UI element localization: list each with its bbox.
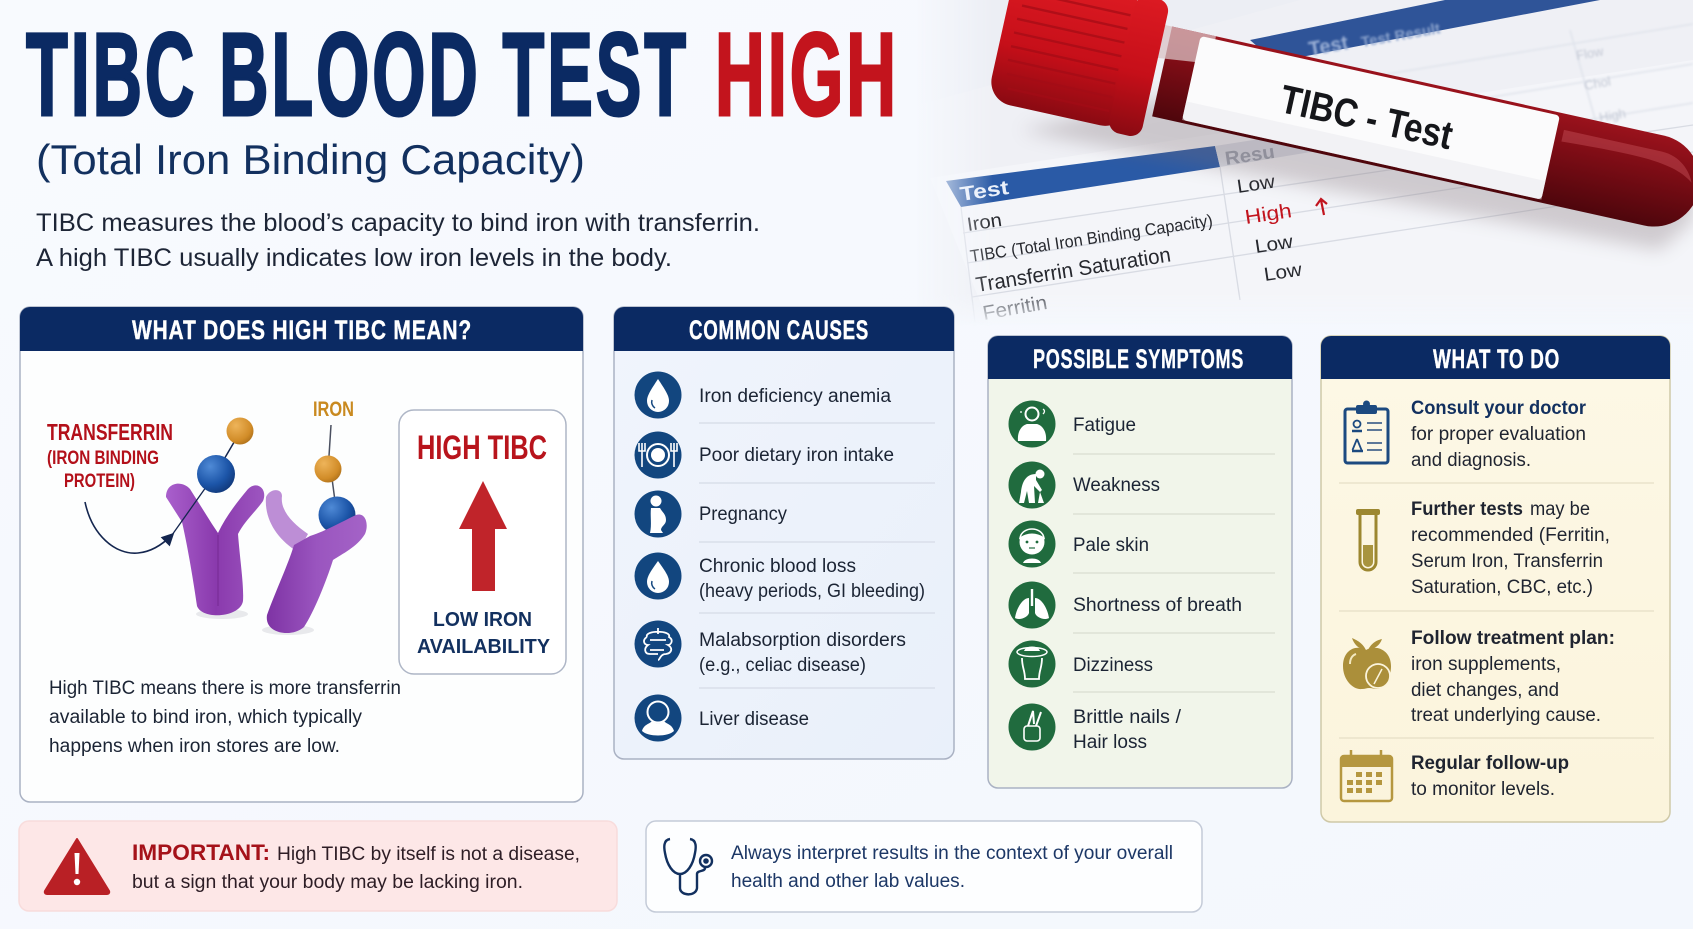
symptom: shortness of breath	[1008, 582, 1242, 628]
symptom: weakness: Weakness	[1073, 475, 1160, 496]
symptom: shortness of breath: Shortness of breath	[1073, 595, 1242, 616]
photo: blood tube on lab report: Test Result	[1360, 20, 1441, 51]
high TIBC box: AVAILABILITY	[417, 635, 550, 658]
photo: blood tube on lab report: High	[1243, 200, 1293, 229]
cause: liver disease: Liver disease	[699, 709, 809, 730]
transferrin label: (IRON BINDING	[47, 447, 159, 469]
symptom: brittle nails / hair loss: Hair loss	[1073, 732, 1147, 753]
symptom: weakness	[1008, 462, 1160, 508]
step: further tests: Further tests	[1411, 499, 1523, 520]
transferrin molecules illustration	[85, 418, 367, 635]
cause: chronic blood loss	[634, 552, 925, 602]
photo: blood tube on lab report: Flow	[1575, 43, 1605, 63]
step: follow treatment plan: Follow treatment plan:	[1411, 628, 1615, 649]
photo: blood tube on lab report: Low	[1236, 172, 1277, 198]
heading: common causes: COMMON CAUSES	[689, 315, 869, 345]
heading: what does high TIBC mean: WHAT DOES HIGH TIBC MEAN?	[132, 315, 472, 345]
step: further tests	[1356, 499, 1610, 598]
tube: TIBC - Test	[1276, 77, 1457, 158]
photo: blood tube on lab report: Test	[958, 177, 1011, 206]
callout: interpret results: Always interpret results in the context of your overall	[731, 843, 1173, 864]
panel: possible symptoms	[988, 336, 1292, 788]
symptom: brittle nails / hair loss: Brittle nails /	[1073, 707, 1182, 728]
icon: stethoscope	[664, 839, 712, 894]
step: follow treatment plan: iron supplements,	[1411, 654, 1561, 675]
step: follow treatment plan	[1343, 628, 1615, 726]
iron label: IRON	[313, 398, 354, 421]
transferrin label	[47, 419, 173, 492]
icon: calendar	[1341, 750, 1392, 801]
cause: iron deficiency anemia: Iron deficiency anemia	[699, 386, 891, 407]
photo: blood tube on lab report: Resu	[1224, 142, 1276, 170]
photo: blood tube on lab report: TIBC (Total Iron Binding Capacity)	[969, 211, 1214, 266]
cause: chronic blood loss: (heavy periods, GI bleeding)	[699, 581, 925, 602]
callout: important: High TIBC by itself is not a disease,	[277, 844, 580, 865]
panel: common causes	[614, 307, 954, 759]
subtitle: (Total Iron Binding Capacity)	[36, 136, 585, 183]
explanation text	[49, 678, 401, 757]
callout: interpret results: health and other lab values.	[731, 871, 965, 892]
symptom: pale skin	[1008, 520, 1149, 568]
step: follow treatment plan: diet changes, and	[1411, 680, 1559, 701]
transferrin label: TRANSFERRIN	[47, 419, 173, 445]
callout: important: IMPORTANT:	[132, 840, 270, 865]
photo: blood tube on lab report: High	[1598, 106, 1627, 125]
intro text: A high TIBC usually indicates low iron levels in the body.	[36, 244, 672, 272]
symptom: dizziness: Dizziness	[1073, 655, 1153, 676]
step: regular follow-up: Regular follow-up	[1411, 753, 1569, 774]
callout: interpret results	[646, 821, 1202, 912]
callout: important	[19, 821, 617, 911]
title: TIBC BLOOD TEST	[26, 9, 689, 141]
step: consult doctor: and diagnosis.	[1411, 450, 1531, 471]
cause: pregnancy	[634, 490, 787, 538]
photo: blood tube on lab report: Low	[1263, 260, 1304, 286]
cause: malabsorption disorders	[634, 620, 906, 676]
photo: blood tube on lab report: Iron	[966, 210, 1003, 236]
photo: blood tube on lab report: Test	[1307, 32, 1350, 61]
transferrin label: PROTEIN)	[64, 470, 135, 492]
high TIBC box: HIGH TIBC	[417, 429, 547, 467]
symptom: dizziness	[1008, 640, 1153, 688]
photo: blood tube on lab report: Low	[1254, 232, 1295, 258]
cause: iron deficiency anemia	[634, 372, 891, 418]
photo: blood tube on lab report: Transferrin Saturation	[974, 243, 1172, 297]
icon: apple	[1343, 638, 1391, 689]
callout: important: but a sign that your body may be lacking iron.	[132, 872, 523, 893]
photo: blood tube on lab report: Chol	[1608, 134, 1637, 153]
explanation text: High TIBC means there is more transferrin	[49, 678, 401, 699]
icon: clipboard	[1345, 400, 1388, 463]
icon: warning triangle	[45, 839, 109, 894]
step: consult doctor: for proper evaluation	[1411, 424, 1586, 445]
heading: what to do: WHAT TO DO	[1433, 344, 1560, 374]
photo: blood tube on lab report: Chol	[1583, 74, 1612, 93]
cause: poor dietary iron intake	[634, 432, 894, 478]
tube	[986, 0, 1693, 259]
photo: blood tube on lab report: Ferritin	[981, 292, 1049, 325]
symptom: fatigue	[1008, 400, 1136, 448]
explanation text: available to bind iron, which typically	[49, 707, 363, 728]
cause: poor dietary iron intake: Poor dietary iron intake	[699, 445, 894, 466]
intro text: TIBC measures the blood’s capacity to bind iron with transferrin.	[36, 209, 760, 237]
icon: up arrow	[459, 481, 507, 591]
step: regular follow-up	[1341, 750, 1569, 801]
icon: test tube	[1356, 509, 1380, 570]
symptom: pale skin: Pale skin	[1073, 535, 1149, 556]
title: HIGH	[715, 9, 899, 141]
heading: possible symptoms: POSSIBLE SYMPTOMS	[1033, 344, 1244, 374]
step: consult doctor	[1345, 398, 1587, 471]
cause: liver disease	[634, 694, 809, 742]
step: further tests: may be	[1530, 499, 1590, 520]
symptom: brittle nails / hair loss	[1008, 704, 1182, 753]
explanation text: happens when iron stores are low.	[49, 736, 340, 757]
cause: malabsorption disorders: (e.g., celiac disease)	[699, 655, 866, 676]
step: further tests: Serum Iron, Transferrin	[1411, 551, 1603, 572]
cause: chronic blood loss: Chronic blood loss	[699, 556, 856, 577]
high TIBC box	[399, 410, 566, 674]
step: further tests: Saturation, CBC, etc.)	[1411, 577, 1593, 598]
symptom: fatigue: Fatigue	[1073, 415, 1136, 436]
photo: blood tube on lab report	[900, 0, 1693, 326]
cause: pregnancy: Pregnancy	[699, 504, 787, 525]
cause: malabsorption disorders: Malabsorption disorders	[699, 630, 906, 651]
panel: what to do	[1321, 336, 1670, 822]
step: regular follow-up: to monitor levels.	[1411, 779, 1555, 800]
intro text	[36, 209, 760, 272]
step: follow treatment plan: treat underlying cause.	[1411, 705, 1601, 726]
high TIBC box: LOW IRON	[433, 608, 532, 631]
step: further tests: recommended (Ferritin,	[1411, 525, 1610, 546]
panel: what does high TIBC mean	[20, 307, 583, 802]
step: consult doctor: Consult your doctor	[1411, 398, 1587, 419]
